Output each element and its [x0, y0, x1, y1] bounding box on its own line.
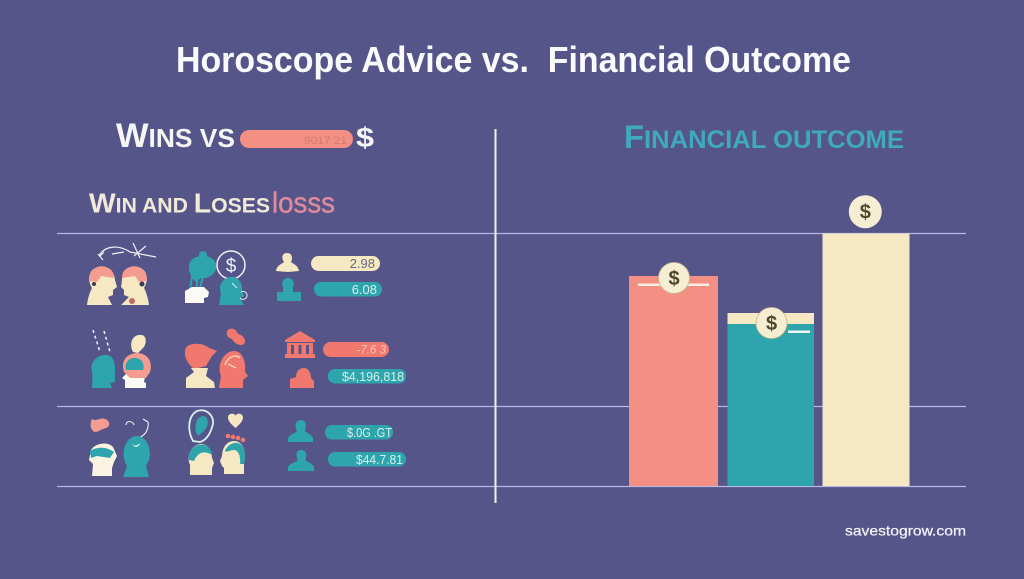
coin: teal bar: [756, 308, 787, 338]
row 2: pink pill: -7.6 3: [357, 344, 387, 356]
subheading: win and loses: WIN AND LOSES: [89, 188, 270, 218]
coin: cream bar: [849, 195, 882, 228]
heading: wins vs: WINS VS: [116, 117, 235, 155]
center divider: [494, 129, 496, 503]
row 1: teal person icon: [277, 278, 301, 301]
website credit: savestogrow.com: [845, 522, 966, 538]
row 1: teal pill: 6.08: [352, 282, 377, 297]
coin: teal bar: $: [766, 313, 777, 335]
row 1: cream pill: [311, 256, 380, 271]
row 3: ear and heart heads icon: [189, 410, 245, 475]
row 1: teal pill: [314, 282, 382, 297]
bar: cream: [822, 234, 910, 486]
subheading: loss: losss: [272, 188, 335, 220]
row 3: lower teal pill: [328, 452, 406, 467]
row 2: teal pill: $4,196,818: [342, 370, 404, 384]
bar: pink: [629, 276, 718, 486]
row 2: bank icon: [285, 331, 315, 358]
row 1: person icon: [276, 253, 299, 272]
row 3: teal person icon: [288, 420, 313, 442]
value pill: 9017 21: [304, 135, 347, 147]
coin: pink bar: $: [668, 268, 680, 290]
row 3: lower teal pill: $44.7.81: [356, 453, 403, 467]
value pill: [240, 130, 353, 148]
row 2: pink pill: [323, 342, 389, 357]
row 3: upper teal pill: [325, 425, 393, 440]
row 2: teal and white heads icon: [91, 330, 151, 388]
heading: wins vs: [116, 117, 374, 155]
row 1: cream pill: 2.98: [350, 256, 375, 271]
title: Horoscope Advice vs. Financial Outcome: [176, 39, 851, 80]
coin: cream bar: $: [860, 202, 871, 224]
bar: teal: [728, 313, 814, 486]
heading: financial outcome: FINANCIAL OUTCOME: [624, 119, 904, 155]
row 1: arguing heads icon: [87, 243, 156, 305]
row 2: pink person icon: [290, 368, 314, 388]
row 2: pink heads icon: [185, 329, 248, 388]
row 3: lower teal person icon: [288, 450, 314, 471]
row 3: glasses head icon: [89, 419, 150, 477]
dollar sign: $: [356, 122, 374, 153]
row 3: upper teal pill: $.0G .GT: [347, 426, 392, 440]
coin: pink bar: [658, 262, 690, 294]
row 1: money heads icon: $: [226, 256, 237, 277]
row 1: money heads icon: [185, 251, 247, 305]
bar chart: [629, 195, 910, 486]
